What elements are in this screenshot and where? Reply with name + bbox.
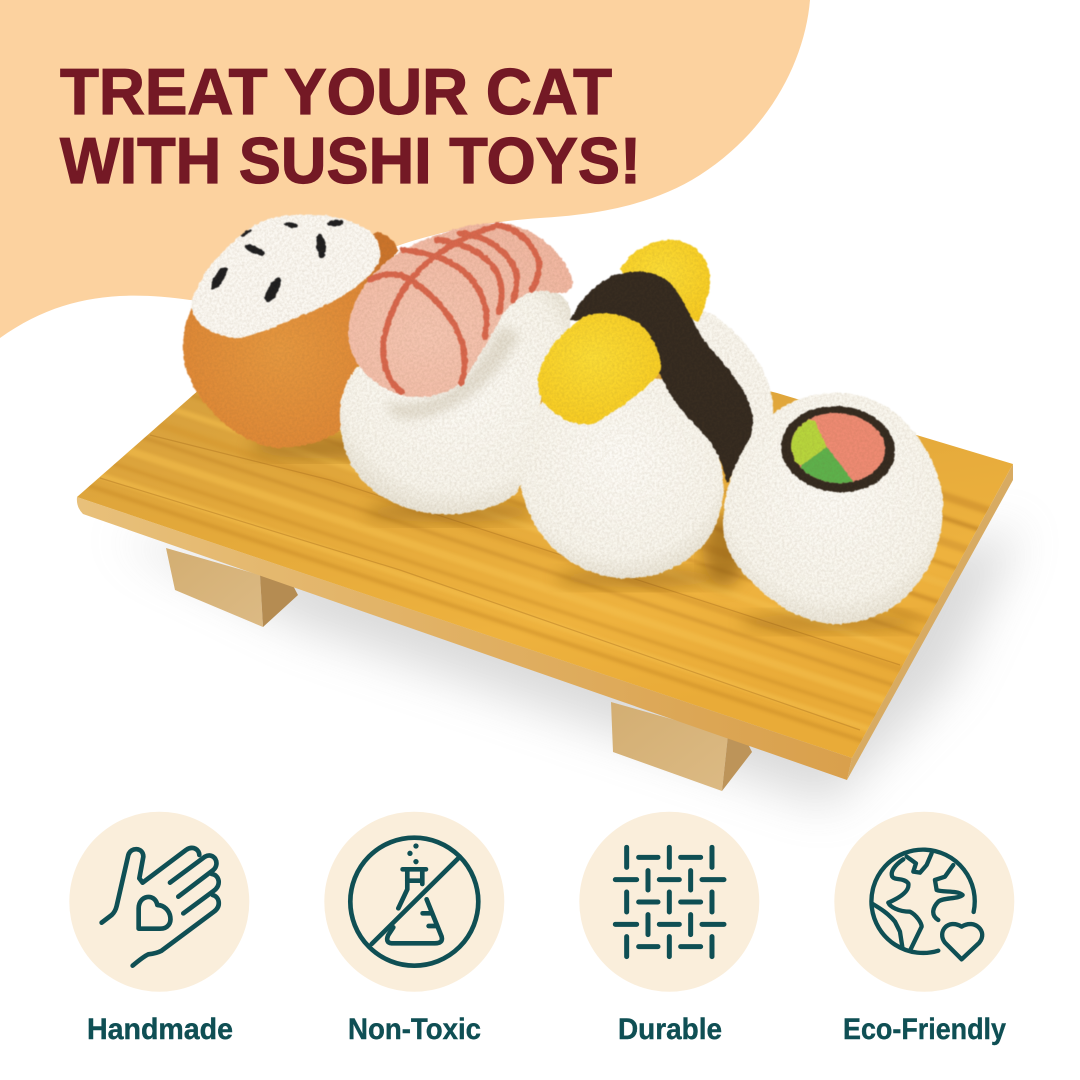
board shadow xyxy=(115,530,1020,805)
title: TREAT YOUR CAT xyxy=(60,55,612,128)
back rice xyxy=(680,305,773,450)
front egg xyxy=(538,313,661,424)
nori band xyxy=(570,272,753,483)
right foot xyxy=(611,702,752,791)
icon: globe with heart xyxy=(871,850,982,959)
left foot xyxy=(166,548,298,627)
maki filling xyxy=(780,404,896,494)
shrimp stripes xyxy=(370,225,539,392)
label: non-toxic: Non-Toxic xyxy=(348,1013,481,1046)
toy: maki roll xyxy=(723,393,943,624)
shrimp shadow on rice xyxy=(385,325,520,419)
badge: handmade xyxy=(69,812,249,1046)
seeds xyxy=(208,220,343,305)
badge: durable xyxy=(579,812,759,1046)
badge: non-toxic xyxy=(324,812,504,1046)
label: eco-friendly: Eco-Friendly xyxy=(843,1013,1006,1046)
icon: woven fabric xyxy=(615,847,724,957)
front rice xyxy=(520,378,723,578)
back egg xyxy=(620,240,710,322)
title: WITH SUSHI TOYS! xyxy=(60,124,641,197)
rice xyxy=(340,289,571,514)
label: handmade: Handmade xyxy=(87,1013,233,1046)
title xyxy=(60,55,641,197)
photo: sushi toys on wooden board xyxy=(60,204,1020,805)
toy: salmon roll xyxy=(183,215,398,448)
toy: shrimp nigiri xyxy=(340,223,573,514)
shrimp xyxy=(348,223,573,397)
badge: eco-friendly xyxy=(834,812,1014,1046)
toy: tamago nigiri xyxy=(520,240,773,578)
icon: hand with heart xyxy=(102,848,219,966)
background blob xyxy=(0,0,810,338)
label: durable: Durable xyxy=(618,1013,722,1046)
icon: crossed-out flask xyxy=(350,838,478,966)
wooden board xyxy=(76,364,1013,780)
